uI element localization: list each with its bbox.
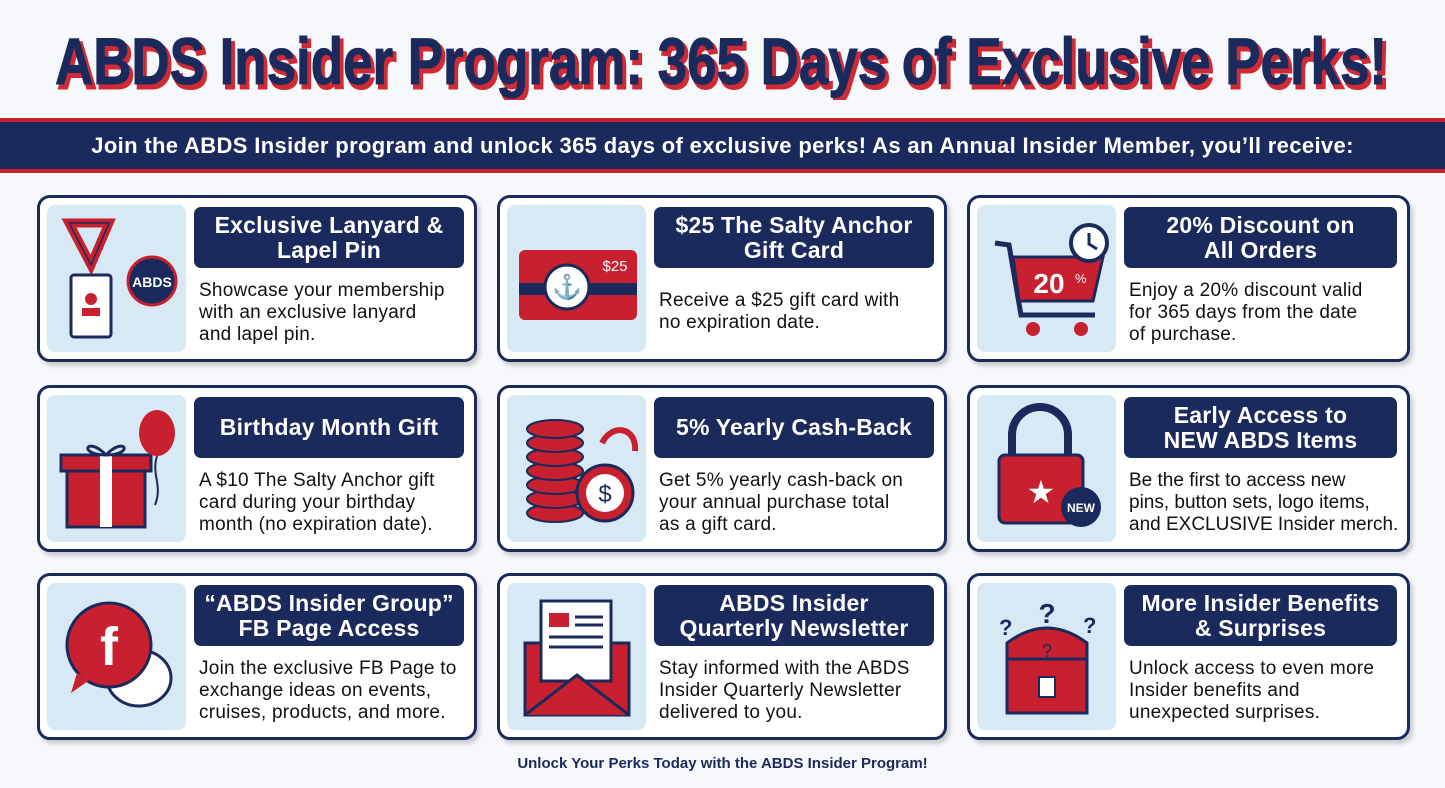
text: Insider Quarterly Newsletter [659, 680, 901, 701]
text: Unlock access to even more [1129, 658, 1374, 679]
icon: cart [977, 205, 1116, 352]
heading [654, 397, 934, 458]
icon: lock: NEW [1067, 501, 1096, 515]
heading [1124, 207, 1397, 268]
text [199, 658, 457, 723]
heading [654, 207, 934, 268]
text: Enjoy a 20% discount valid [1129, 280, 1363, 301]
heading [194, 207, 464, 268]
text: unexpected surprises. [1129, 702, 1320, 723]
icon: gift card [507, 205, 646, 352]
heading: NEW ABDS Items [1164, 426, 1357, 452]
panel: facebook [37, 573, 477, 740]
heading: Quarterly Newsletter [680, 614, 908, 640]
heading: “ABDS Insider Group” [204, 590, 454, 616]
text: Receive a $25 gift card with [659, 290, 899, 311]
text: delivered to you. [659, 702, 803, 723]
heading: All Orders [1204, 236, 1317, 262]
text: no expiration date. [659, 312, 820, 333]
heading [1124, 585, 1397, 646]
icon: coins [507, 395, 646, 542]
icon: chest: ? [1042, 641, 1052, 661]
icon: chest: ? [1083, 613, 1096, 638]
heading: Birthday Month Gift [220, 414, 438, 440]
text: your annual purchase total [659, 492, 889, 513]
banner: Join the ABDS Insider program and unlock 365 days of exclusive perks! As an Annual Insider Member, you’ll receive: [91, 133, 1354, 158]
text [1129, 470, 1398, 535]
panel: gift card [497, 195, 947, 362]
heading: Early Access to [1174, 402, 1347, 428]
panel: early access [967, 385, 1410, 552]
text: cruises, products, and more. [199, 702, 446, 723]
icon: chest: ? [1038, 598, 1056, 629]
text [199, 470, 435, 535]
panel: newsletter [497, 573, 947, 740]
icon: gift [47, 395, 186, 542]
icon: lock [977, 395, 1116, 542]
text: card during your birthday [199, 492, 415, 513]
heading: 5% Yearly Cash-Back [676, 414, 912, 440]
heading: 20% Discount on [1166, 212, 1355, 238]
text [1129, 658, 1374, 723]
panel: discount [967, 195, 1410, 362]
panel: cashback [497, 385, 947, 552]
text: Join the exclusive FB Page to [199, 658, 457, 679]
text: of purchase. [1129, 324, 1237, 345]
text [199, 280, 445, 345]
heading [194, 585, 464, 646]
icon: lanyard: ABDS [132, 274, 172, 290]
heading: Lapel Pin [277, 236, 381, 262]
text: month (no expiration date). [199, 514, 433, 535]
heading: $25 The Salty Anchor [675, 212, 913, 238]
icon: envelope [507, 583, 646, 730]
text: and EXCLUSIVE Insider merch. [1129, 514, 1398, 535]
icon: coins: $ [598, 481, 612, 508]
text: Showcase your membership [199, 280, 445, 301]
heading: & Surprises [1195, 614, 1326, 640]
heading: ABDS Insider [719, 590, 869, 616]
heading [194, 397, 464, 458]
heading: More Insider Benefits [1141, 590, 1380, 616]
panel: lanyard [37, 195, 477, 362]
icon: lanyard [47, 205, 186, 352]
text: for 365 days from the date [1129, 302, 1357, 323]
banner [0, 118, 1445, 173]
icon: lock: ★ [1027, 474, 1055, 510]
heading [654, 585, 934, 646]
text: with an exclusive lanyard [199, 302, 416, 323]
icon: chest: ? [999, 615, 1012, 640]
text: and lapel pin. [199, 324, 316, 345]
text [659, 658, 910, 723]
text: Be the first to access new [1129, 470, 1346, 491]
icon: facebook bubble: f [100, 617, 119, 677]
icon: facebook bubble [47, 583, 186, 730]
icon: cart: 20 [1033, 268, 1065, 299]
text: Stay informed with the ABDS [659, 658, 910, 679]
footer: Unlock Your Perks Today with the ABDS Insider Program! [517, 755, 928, 772]
text [659, 470, 903, 535]
text: Get 5% yearly cash-back on [659, 470, 903, 491]
text: exchange ideas on events, [199, 680, 431, 701]
heading: FB Page Access [239, 614, 419, 640]
text: A $10 The Salty Anchor gift [199, 470, 435, 491]
text: pins, button sets, logo items, [1129, 492, 1370, 513]
text [1129, 280, 1363, 345]
heading [1124, 397, 1397, 458]
icon: gift card: $25 [602, 258, 628, 275]
text [659, 290, 899, 333]
heading: Exclusive Lanyard & [215, 212, 443, 238]
panel: birthday [37, 385, 477, 552]
icon: chest [977, 583, 1116, 730]
panel: surprises [967, 573, 1410, 740]
icon: gift card: ⚓ [552, 273, 582, 301]
text: as a gift card. [659, 514, 777, 535]
icon: cart: % [1075, 271, 1087, 286]
text: Insider benefits and [1129, 680, 1300, 701]
heading: Gift Card [744, 236, 844, 262]
